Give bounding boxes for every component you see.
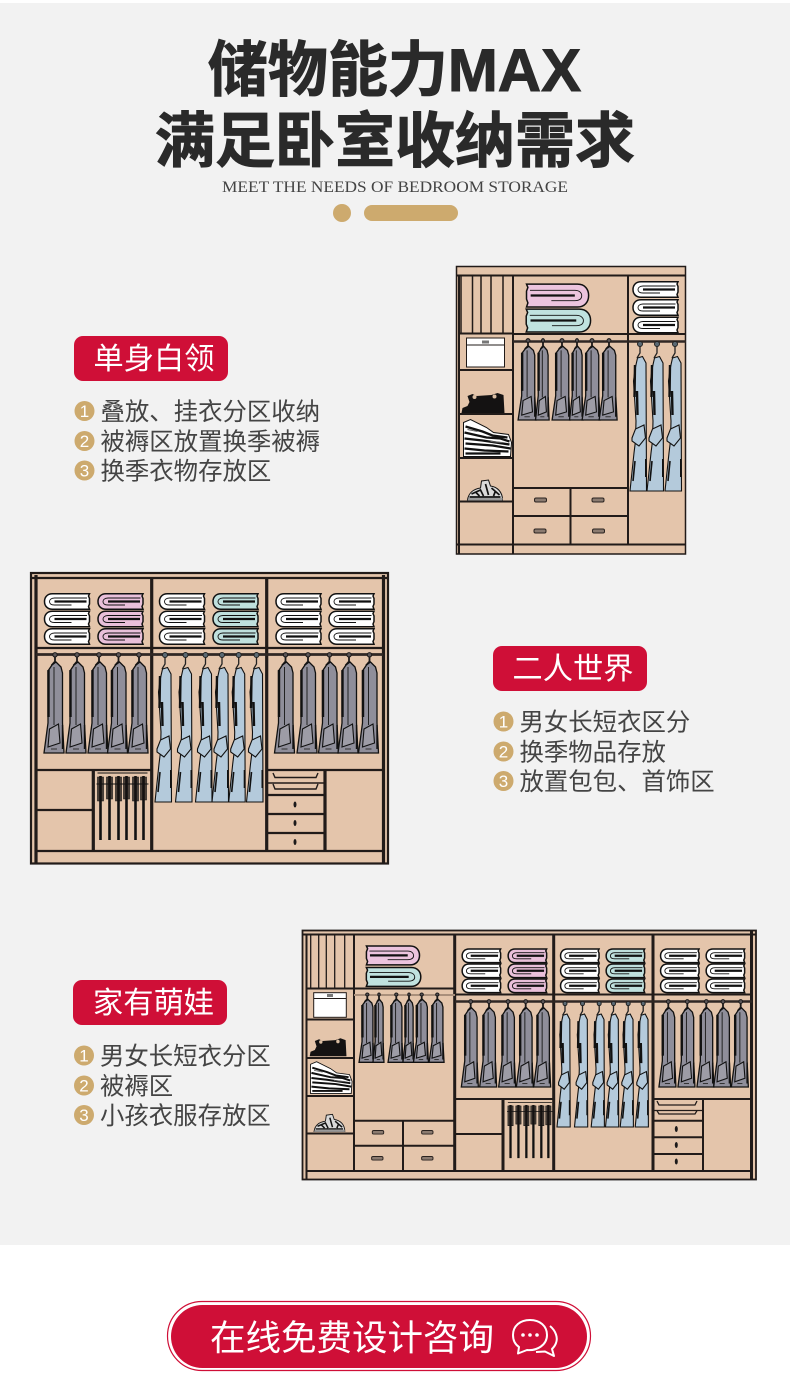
blue long coats — [630, 342, 682, 491]
consult button: 在线免费设计咨询 — [210, 1318, 494, 1358]
box — [314, 993, 346, 1017]
box — [466, 338, 504, 367]
grey hanging jackets — [44, 653, 378, 753]
title: 储物能力MAX — [208, 37, 581, 104]
list: single: 2 — [80, 432, 89, 451]
icon: chat bubbles — [513, 1320, 557, 1356]
towels — [366, 946, 745, 993]
list: couple: 放置包包、首饰区 — [520, 769, 715, 796]
folded clothes — [310, 1038, 352, 1132]
list: single: 叠放、挂衣分区收纳 — [100, 399, 320, 426]
label: single: 单身白领 — [93, 342, 215, 376]
title decoration — [333, 204, 458, 222]
folded clothes — [462, 393, 512, 500]
label: family: 家有萌娃 — [93, 986, 214, 1020]
list: family: 1 — [79, 1046, 89, 1066]
wardrobe: family — [302, 930, 756, 1180]
blue long coats — [557, 1001, 648, 1127]
drawer knobs — [675, 1126, 678, 1164]
list: single: 换季衣物存放区 — [100, 458, 271, 486]
list: couple: 2 — [499, 742, 508, 762]
list: couple: 换季物品存放 — [520, 740, 666, 766]
label: family — [73, 980, 227, 1025]
towels — [526, 282, 678, 333]
drawer handles — [372, 1130, 433, 1160]
list: family: 被褥区 — [100, 1074, 173, 1100]
drawer knobs — [294, 802, 296, 845]
list: couple: 男女长短衣区分 — [520, 710, 690, 736]
list: single: 被褥区放置换季被褥 — [100, 429, 320, 456]
grey hanging jackets — [518, 339, 617, 420]
list: family: 2 — [79, 1076, 89, 1096]
label: single — [74, 336, 228, 381]
list: couple: 1 — [499, 712, 508, 732]
towels — [44, 594, 374, 644]
wardrobe: single — [456, 266, 686, 554]
label: couple — [493, 646, 647, 691]
belt rack — [507, 1103, 553, 1158]
list: couple: 3 — [499, 772, 508, 791]
list: family: 3 — [79, 1106, 89, 1125]
list: single: 3 — [80, 462, 89, 480]
list: single: 1 — [80, 402, 89, 421]
list: family: 小孩衣服存放区 — [100, 1103, 271, 1130]
title: 满足卧室收纳需求 — [155, 108, 635, 175]
belt rack — [96, 773, 148, 840]
wardrobe: couple — [31, 573, 388, 864]
list: single — [74, 399, 320, 486]
label: couple: 二人世界 — [512, 652, 634, 686]
drawer handles — [534, 498, 604, 533]
list: couple — [494, 710, 715, 796]
consult button — [168, 1302, 590, 1370]
grey hanging jackets — [359, 993, 748, 1087]
subtitle: MEET THE NEEDS OF BEDROOM STORAGE — [222, 179, 568, 196]
list: family — [74, 1044, 271, 1130]
title — [155, 37, 635, 175]
list: family: 男女长短衣分区 — [100, 1044, 271, 1070]
blue long coats — [155, 652, 263, 802]
